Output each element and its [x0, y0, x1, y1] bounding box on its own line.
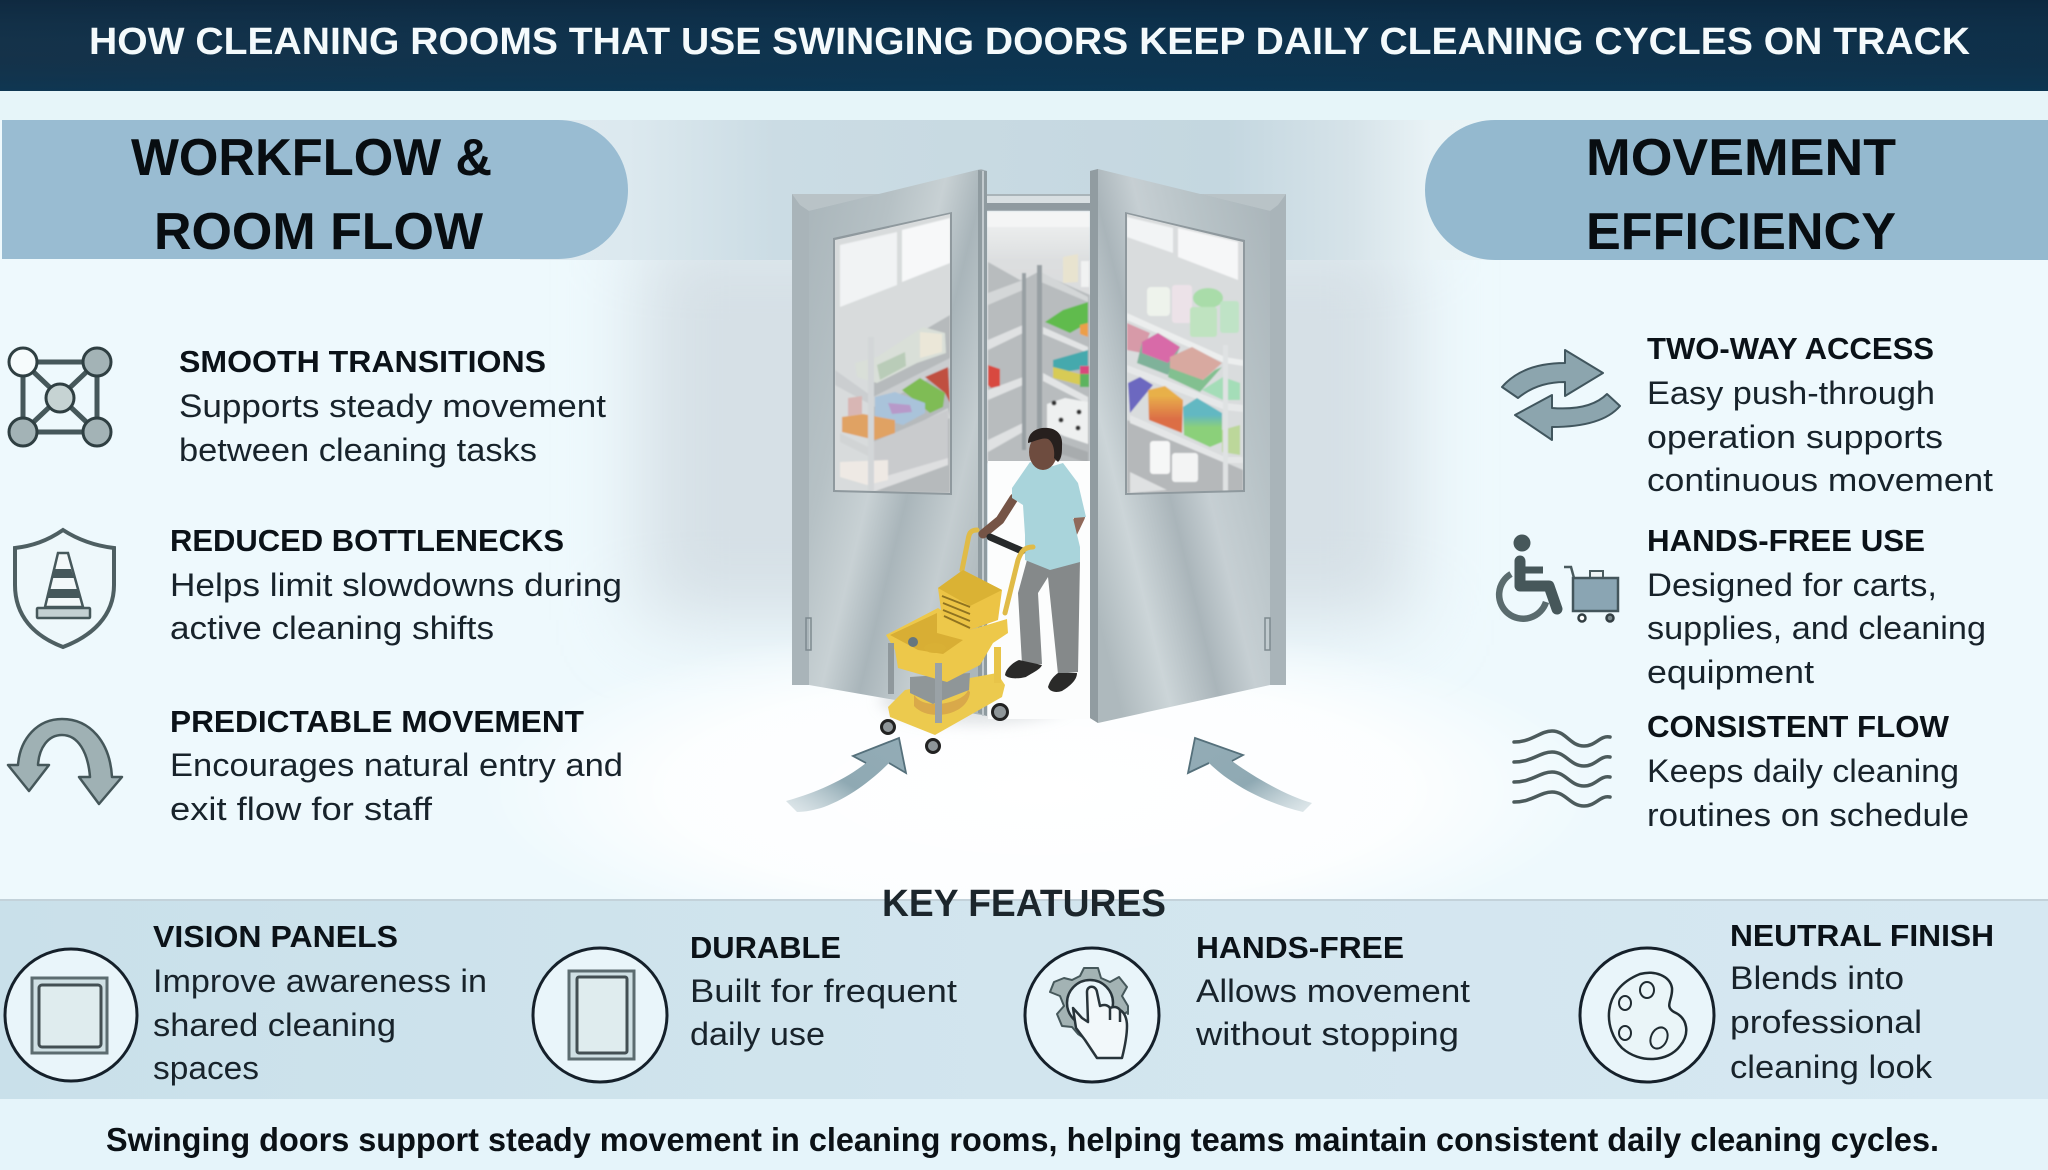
text: smooth transitions: SMOOTH TRANSITIONS: [179, 344, 546, 379]
text: reduced bottlenecks: [170, 523, 622, 646]
illustration: double swinging doors with worker and cart: [792, 169, 1286, 752]
icon: two-way arrows: [1502, 350, 1620, 440]
panel: key features band: [0, 883, 2048, 1099]
yellow mop bucket cart: [882, 530, 1033, 752]
text: hands-free use: supplies, and cleaning: [1647, 610, 1986, 646]
shirt: [1012, 462, 1086, 570]
right door leaf: [1090, 169, 1270, 723]
arrow: left entry arrow: [786, 738, 906, 812]
head: [1029, 434, 1057, 470]
feature: vision panels: spaces: [153, 1050, 259, 1086]
feature: hands-free: HANDS-FREE: [1196, 930, 1404, 965]
text: two-way access: [1647, 331, 1993, 498]
feature: hands-free: [1025, 930, 1470, 1082]
text: consistent flow: routines on schedule: [1647, 797, 1969, 833]
wheels: [882, 720, 894, 734]
feature: hands-free: without stopping: [1195, 1016, 1459, 1052]
feature: neutral finish: professional: [1730, 1004, 1922, 1040]
text: consistent flow: Keeps daily cleaning: [1647, 753, 1959, 789]
background: [520, 120, 1484, 899]
feature: hands-free: Allows movement: [1196, 973, 1470, 1009]
text: two-way access: TWO-WAY ACCESS: [1647, 331, 1934, 366]
panel: movement efficiency heading: [1425, 120, 2048, 261]
icon: flowing waves: [1514, 731, 1610, 806]
icon: wheelchair and supply cart: [1499, 534, 1618, 622]
text: reduced bottlenecks: active cleaning shifts: [170, 610, 494, 646]
cart posts: [888, 643, 894, 694]
panel: movement efficiency heading: EFFICIENCY: [1586, 203, 1896, 261]
panel: workflow and room flow heading: WORKFLOW &: [131, 129, 492, 187]
feature: neutral finish: [1580, 918, 1994, 1085]
text: smooth transitions: Supports steady movement: [179, 388, 606, 424]
feature: neutral finish: cleaning look: [1730, 1049, 1933, 1085]
door frame: [792, 194, 1286, 685]
lower tray: [888, 673, 1005, 735]
arms: [983, 498, 1014, 534]
text: reduced bottlenecks: Helps limit slowdowns during: [170, 567, 622, 603]
text: hands-free use: equipment: [1647, 654, 1814, 690]
wringer: [938, 570, 1002, 630]
key features heading: KEY FEATURES: [882, 883, 1166, 925]
feature: neutral finish: Blends into: [1730, 960, 1904, 996]
text: predictable movement: exit flow for staff: [170, 791, 432, 827]
footer summary: Swinging doors support steady movement in cleaning rooms, helping teams maintain consistent daily cleaning cycles.: [106, 1121, 1939, 1158]
text: two-way access: continuous movement: [1647, 462, 1993, 498]
text: smooth transitions: [179, 344, 606, 468]
push handle: [990, 537, 1022, 551]
text: reduced bottlenecks: REDUCED BOTTLENECKS: [170, 523, 564, 558]
text: two-way access: Easy push-through: [1647, 375, 1935, 411]
text: consistent flow: [1647, 709, 1969, 833]
shoes: [1005, 660, 1042, 678]
panel: workflow and room flow heading: [2, 120, 628, 261]
title banner: [0, 0, 2048, 91]
text: hands-free use: [1647, 523, 1986, 690]
room interior with shelves: [987, 211, 1090, 463]
text: smooth transitions: between cleaning tasks: [179, 432, 537, 468]
trousers: [1018, 560, 1080, 674]
text: two-way access: operation supports: [1647, 419, 1943, 455]
icon: shield with traffic cone: [15, 530, 114, 647]
feature: vision panels: shared cleaning: [153, 1007, 396, 1043]
feature: durable: DURABLE: [690, 930, 841, 965]
feature: vision panels: Improve awareness in: [153, 963, 487, 999]
text: consistent flow: CONSISTENT FLOW: [1647, 709, 1950, 744]
left vision panel: [833, 212, 953, 497]
feature: durable: [533, 930, 957, 1082]
text: predictable movement: [170, 704, 623, 827]
feature: vision panels: VISION PANELS: [153, 919, 398, 954]
title: HOW CLEANING ROOMS THAT USE SWINGING DOORS KEEP DAILY CLEANING CYCLES ON TRACK: [89, 21, 1971, 63]
panel: movement efficiency heading: MOVEMENT: [1586, 129, 1896, 187]
worker: [983, 428, 1086, 692]
text: predictable movement: Encourages natural entry and: [170, 747, 623, 783]
text: hands-free use: Designed for carts,: [1647, 567, 1937, 603]
feature: durable: Built for frequent: [690, 973, 957, 1009]
icon: u-turn arrow: [8, 719, 122, 804]
feature: neutral finish: NEUTRAL FINISH: [1730, 918, 1994, 953]
text: hands-free use: HANDS-FREE USE: [1647, 523, 1925, 558]
bucket under basin: [914, 690, 970, 715]
arrow: right entry arrow: [1188, 738, 1312, 812]
text: predictable movement: PREDICTABLE MOVEMENT: [170, 704, 584, 739]
left door leaf: [806, 169, 987, 716]
basin: [886, 608, 1008, 682]
feature: durable: daily use: [690, 1016, 825, 1052]
feature: vision panels: [5, 919, 487, 1086]
panel: workflow and room flow heading: ROOM FLOW: [154, 203, 484, 261]
icon: network of connected nodes: [9, 348, 111, 446]
footer summary: [0, 1099, 2048, 1170]
floor shadow: [880, 676, 1070, 724]
right vision panel: [1125, 212, 1247, 497]
